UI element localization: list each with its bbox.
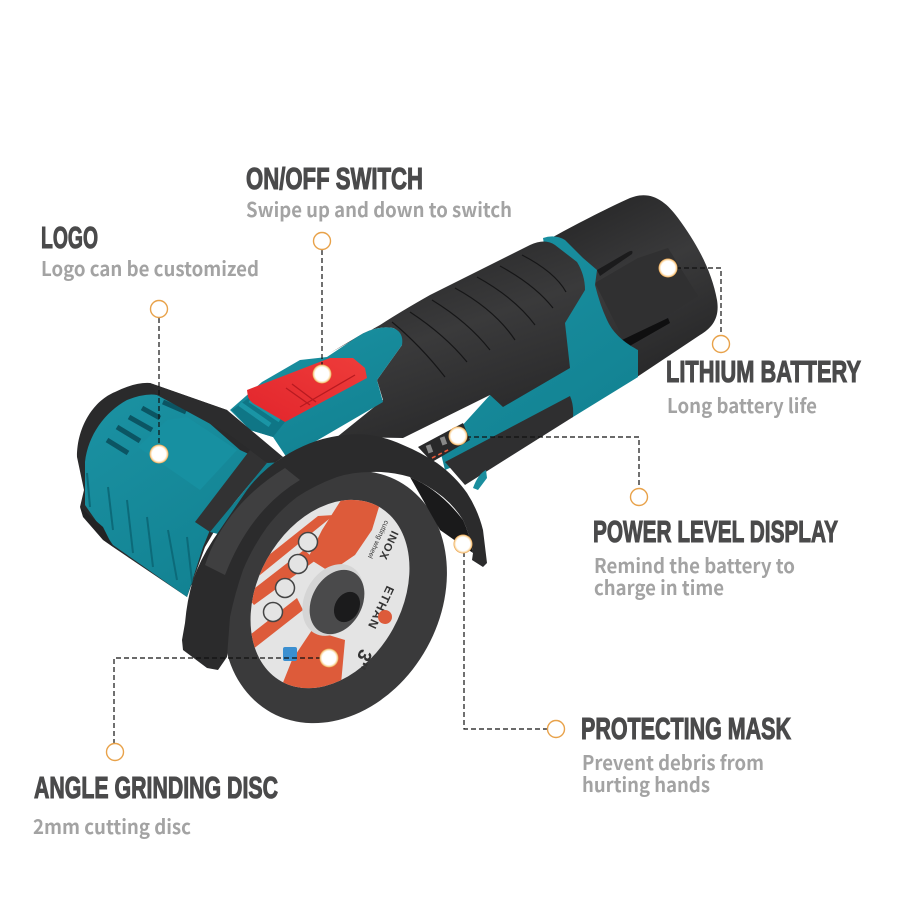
callout: logo (41, 220, 259, 282)
callout: protecting mask: Prevent debris from (582, 747, 764, 776)
battery pack (553, 195, 718, 377)
callout: angle grinding disc: 2mm cutting disc (33, 811, 191, 840)
safety icons (264, 532, 318, 622)
lower black handle section (445, 396, 573, 490)
protective guard (182, 434, 487, 670)
callout: protecting mask: hurting hands (582, 769, 710, 798)
callout: power level display: Remind the battery to (594, 550, 795, 579)
callout: protecting mask (581, 711, 791, 798)
disc label (250, 500, 410, 688)
callout markers on product (150, 258, 678, 668)
teal switch housing (230, 327, 402, 458)
callout: power level display (593, 514, 838, 601)
disc branding: cutting wheel (366, 519, 390, 560)
callout lines (114, 250, 721, 743)
power level indicator panel (418, 423, 470, 462)
teal handle collar and lower stripe (440, 236, 638, 470)
disc branding: ETHAN (365, 584, 397, 632)
logo plate (138, 417, 237, 490)
motor housing (77, 383, 283, 597)
callout: on/off switch: Swipe up and down to switch (246, 194, 512, 223)
grinder product image (77, 195, 718, 763)
callout: protecting mask: PROTECTING MASK (581, 711, 791, 746)
callout: logo: Logo can be customized (41, 253, 259, 282)
black rubber grip (330, 242, 585, 438)
callout: on/off switch (246, 161, 512, 223)
hub nut (290, 553, 376, 647)
callout: lithium battery (666, 354, 861, 419)
callout: lithium battery: Long battery life (667, 390, 817, 419)
disc branding: 3" (348, 646, 376, 673)
callout end rings (106, 232, 730, 760)
callout: logo: LOGO (41, 220, 98, 255)
callout: angle grinding disc: ANGLE GRINDING DISC (34, 770, 278, 805)
red on/off switch (247, 358, 367, 422)
callout: on/off switch: ON/OFF SWITCH (246, 161, 423, 196)
grinding disc (227, 472, 447, 724)
callout: power level display: charge in time (594, 572, 724, 601)
disc branding: INOX (376, 529, 400, 562)
callout: angle grinding disc (33, 770, 278, 840)
disc branding (283, 519, 400, 673)
